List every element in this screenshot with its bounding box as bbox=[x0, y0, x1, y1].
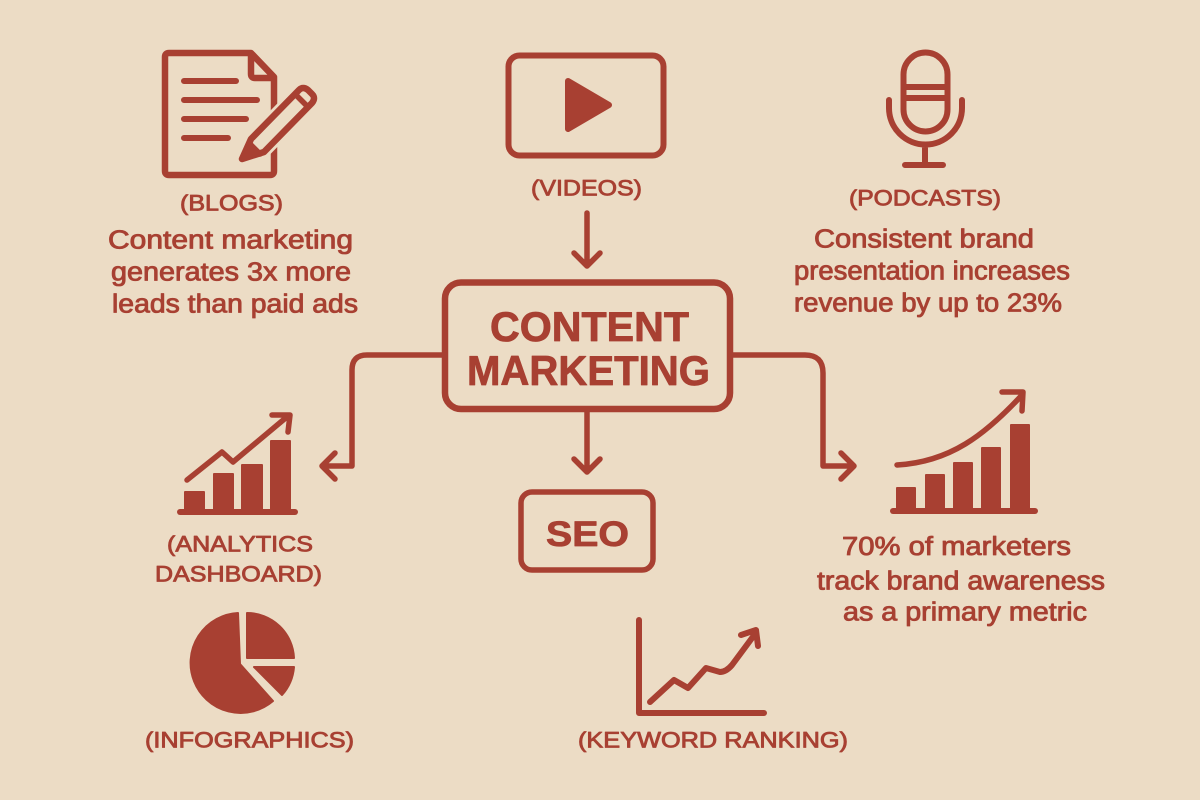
text: blogs statistic: generates 3x more bbox=[111, 258, 351, 286]
text: podcasts statistic: presentation increases bbox=[794, 258, 1070, 286]
text: podcasts statistic: Consistent brand bbox=[814, 226, 1034, 254]
label: keyword ranking: (KEYWORD RANKING) bbox=[578, 728, 848, 752]
central box: content marketing: CONTENT bbox=[490, 303, 689, 350]
box: seo: SEO bbox=[546, 515, 629, 554]
label: infographics: (INFOGRAPHICS) bbox=[145, 728, 354, 752]
panel: brand awareness bbox=[817, 392, 1105, 626]
icon: document and pencil bbox=[165, 53, 314, 175]
text: brand awareness statistic: as a primary metric bbox=[843, 598, 1087, 626]
label: blogs: (BLOGS) bbox=[180, 190, 283, 216]
arrow: videos to content marketing bbox=[574, 213, 600, 266]
label: analytics dashboard bbox=[155, 532, 322, 586]
text: podcasts statistic: revenue by up to 23% bbox=[794, 290, 1062, 318]
icon: microphone bbox=[889, 52, 962, 165]
panel: keyword ranking bbox=[578, 620, 848, 752]
icon: analytics bar chart bbox=[180, 415, 295, 512]
text: blogs statistic: Content marketing bbox=[108, 226, 353, 254]
panel: blogs bbox=[108, 53, 358, 318]
panel: infographics bbox=[145, 613, 354, 752]
panel: videos bbox=[508, 56, 664, 200]
arrow: content marketing to analytics bbox=[322, 355, 444, 479]
central box: content marketing: MARKETING bbox=[467, 347, 710, 394]
text: podcasts statistic bbox=[794, 226, 1070, 318]
label: analytics dashboard: (ANALYTICS bbox=[167, 532, 313, 556]
icon: video player bbox=[508, 56, 664, 156]
panel: seo bbox=[521, 492, 653, 570]
text: brand awareness statistic: 70% of marketers bbox=[842, 533, 1071, 561]
icon: growth bar chart bbox=[893, 392, 1035, 511]
icon: pie chart bbox=[191, 613, 294, 713]
text: blogs statistic bbox=[108, 226, 358, 318]
icon: keyword line chart bbox=[639, 620, 764, 713]
panel: podcasts bbox=[794, 52, 1070, 318]
central box: content marketing bbox=[445, 282, 730, 409]
arrow: content marketing to brand metric bbox=[731, 355, 854, 479]
label: videos: (VIDEOS) bbox=[531, 176, 642, 200]
panel: analytics dashboard bbox=[155, 415, 322, 586]
text: brand awareness statistic: track brand awareness bbox=[817, 568, 1105, 596]
label: podcasts: (PODCASTS) bbox=[849, 186, 1001, 210]
label: analytics dashboard: DASHBOARD) bbox=[155, 562, 322, 586]
text: brand awareness statistic bbox=[817, 533, 1105, 626]
text: blogs statistic: leads than paid ads bbox=[112, 290, 358, 318]
arrow: content marketing to seo bbox=[574, 412, 600, 472]
